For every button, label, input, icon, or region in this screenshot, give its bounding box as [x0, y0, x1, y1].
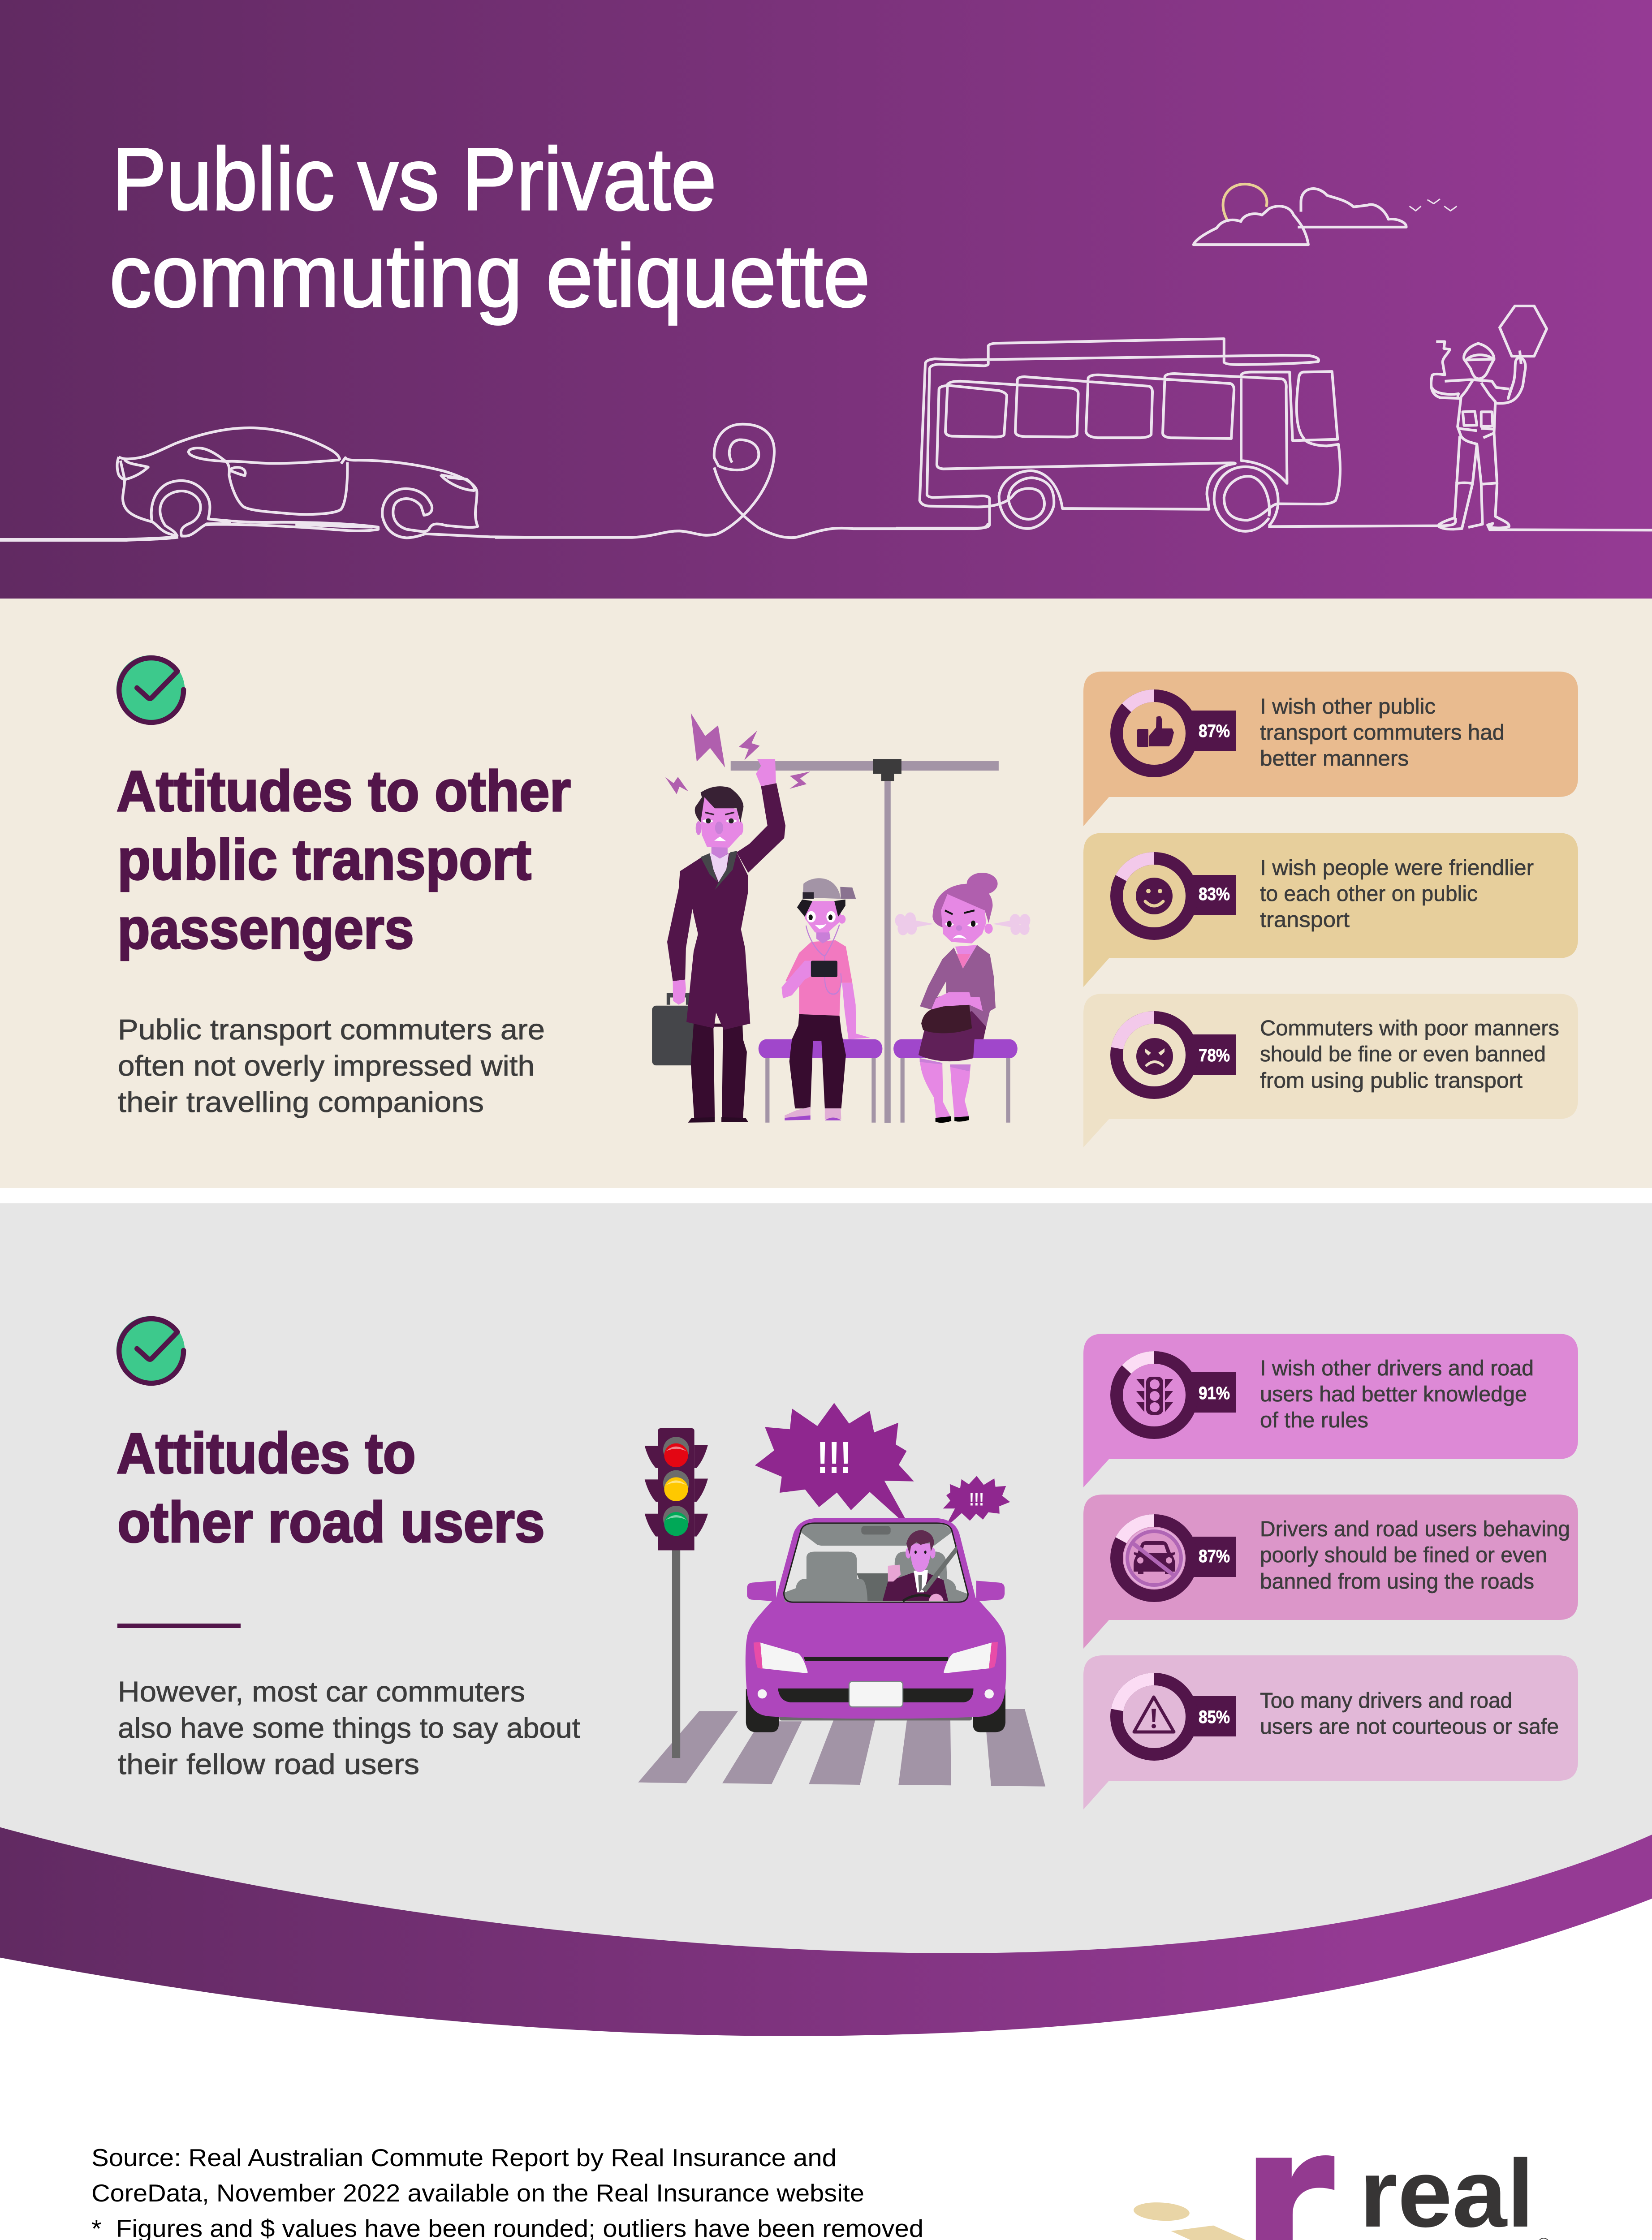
- icon: traffic light: [645, 1428, 708, 1758]
- text block: public transport intro: often not overly impressed with: [118, 1050, 535, 1082]
- heading: attitudes to other public transport passengers: [116, 759, 571, 961]
- chart: donut 87%: [1101, 680, 1208, 787]
- callout: not courteous 85%: Too many drivers and road: [1260, 1689, 1512, 1713]
- callout: better manners 87%: 87%: [1199, 721, 1230, 741]
- callout: not courteous 85%: users are not courteous or safe: [1260, 1715, 1559, 1739]
- text block: public transport intro: [118, 1013, 545, 1118]
- panel: attitudes to other road users: [0, 1203, 1652, 2036]
- heading: attitudes to other public transport passengers: Attitudes to other: [116, 759, 571, 823]
- icon: large speech burst: [755, 1403, 914, 1529]
- icon: small speech burst: [943, 1476, 1010, 1529]
- text block: source notes: Source: Real Australian Commute Report by Real Insurance and: [91, 2144, 837, 2171]
- callout: not courteous 85%: 85%: [1199, 1707, 1230, 1727]
- figure: driver: [883, 1530, 957, 1601]
- panel: attitudes to public transport passengers: [0, 599, 1652, 1188]
- icon: warning triangle: [1134, 1697, 1174, 1732]
- callout: friendlier 83%: I wish people were friendlier: [1260, 856, 1534, 880]
- callout: knowledge of rules 91%: users had better knowledge: [1260, 1383, 1527, 1406]
- icon: large speech burst: !!!: [817, 1433, 851, 1483]
- text block: public transport intro: Public transport commuters are: [118, 1013, 545, 1046]
- heading: attitudes to other public transport passengers: passengers: [117, 897, 414, 961]
- callout: friendlier 83%: to each other on public: [1260, 882, 1478, 906]
- callout: poor manners 78%: [1083, 994, 1578, 1147]
- heading: attitudes to other road users: other road users: [117, 1490, 545, 1555]
- callout: not courteous 85%: [1083, 1655, 1578, 1809]
- chart: donut 91%: [1101, 1342, 1208, 1448]
- callout: friendlier 83%: 83%: [1199, 884, 1230, 904]
- callout: poor manners 78%: should be fine or even banned: [1260, 1042, 1546, 1066]
- chart: donut 83%: [1103, 845, 1205, 947]
- icon: clouds, sun and birds line art: [1194, 184, 1457, 245]
- heading: attitudes to other road users: [116, 1422, 545, 1555]
- figure: seated boy with phone: [781, 878, 870, 1120]
- text block: road users intro: also have some things to say about: [118, 1712, 580, 1744]
- callout: better manners 87%: transport commuters had: [1260, 721, 1505, 745]
- text block: road users intro: their fellow road users: [118, 1748, 419, 1780]
- icon: smiley: [1136, 878, 1173, 914]
- callout: poor manners 78%: from using public transport: [1260, 1069, 1523, 1093]
- illustration: passengers on public transport: [652, 713, 1030, 1123]
- crossing stripes: [638, 1709, 1045, 1787]
- title: commuting etiquette: [109, 226, 870, 325]
- figure: standing man: [652, 759, 785, 1123]
- logo: real insurance: [1130, 2139, 1550, 2240]
- callout: friendlier 83%: transport: [1260, 908, 1350, 932]
- callout: knowledge of rules 91%: [1083, 1334, 1578, 1487]
- callout: poor manners 78%: 78%: [1199, 1046, 1230, 1065]
- text block: source notes: CoreData, November 2022 available on the Real Insurance website: [91, 2179, 864, 2207]
- callout: poor manners 78%: Commuters with poor manners: [1260, 1017, 1559, 1040]
- heading: attitudes to other road users: Attitudes to: [116, 1422, 416, 1486]
- callout: better manners 87%: better manners: [1260, 747, 1409, 771]
- text block: road users intro: [118, 1676, 580, 1780]
- callout: fined or banned 87%: banned from using the roads: [1260, 1570, 1534, 1594]
- icon: green check: [116, 655, 185, 724]
- panel: header: [0, 0, 1652, 599]
- icon: lightning bolts: [665, 713, 810, 794]
- figure: angry seated woman with steam: [895, 873, 1030, 1123]
- title: [109, 129, 870, 325]
- chart: donut 78%: [1110, 1011, 1198, 1099]
- icon: sports car line art: [0, 428, 538, 540]
- figure: purple car: [746, 1518, 1006, 1732]
- icon: road line with map pin: [495, 424, 988, 538]
- title: Public vs Private: [112, 129, 716, 228]
- icon: small speech burst: !!!: [969, 1489, 984, 1510]
- text block: public transport intro: their travelling companions: [118, 1086, 484, 1118]
- callout: friendlier 83%: [1083, 833, 1578, 987]
- text block: source notes: [91, 2144, 923, 2240]
- icon: traffic officer line art: [1431, 306, 1652, 530]
- callout: knowledge of rules 91%: I wish other drivers and road: [1260, 1357, 1534, 1380]
- heading: attitudes to other public transport passengers: public transport: [117, 828, 531, 892]
- icon: traffic light glyph: [1136, 1377, 1173, 1415]
- callout: better manners 87%: [1083, 672, 1578, 826]
- icon: no cars sign: [1124, 1528, 1185, 1589]
- decoration: bottom purple wave: [0, 1809, 1652, 2036]
- icon: bus line art: [896, 339, 1456, 531]
- icon: angry face: [1136, 1038, 1173, 1075]
- callout: better manners 87%: I wish other public: [1260, 695, 1436, 719]
- callout: fined or banned 87%: Drivers and road users behaving: [1260, 1517, 1570, 1541]
- callout: fined or banned 87%: poorly should be fined or even: [1260, 1543, 1547, 1567]
- icon: thumbs up: [1137, 716, 1174, 747]
- illustration: angry driver at crossing: [638, 1403, 1045, 1787]
- chart: donut 87%: [1103, 1507, 1205, 1609]
- chart: donut 85%: [1110, 1673, 1198, 1761]
- callout: fined or banned 87%: 87%: [1199, 1546, 1230, 1566]
- callout: knowledge of rules 91%: 91%: [1199, 1383, 1230, 1403]
- callout: fined or banned 87%: [1083, 1495, 1578, 1649]
- icon: green check: [116, 1316, 185, 1384]
- text block: road users intro: However, most car commuters: [118, 1676, 525, 1708]
- callout: knowledge of rules 91%: of the rules: [1260, 1409, 1368, 1432]
